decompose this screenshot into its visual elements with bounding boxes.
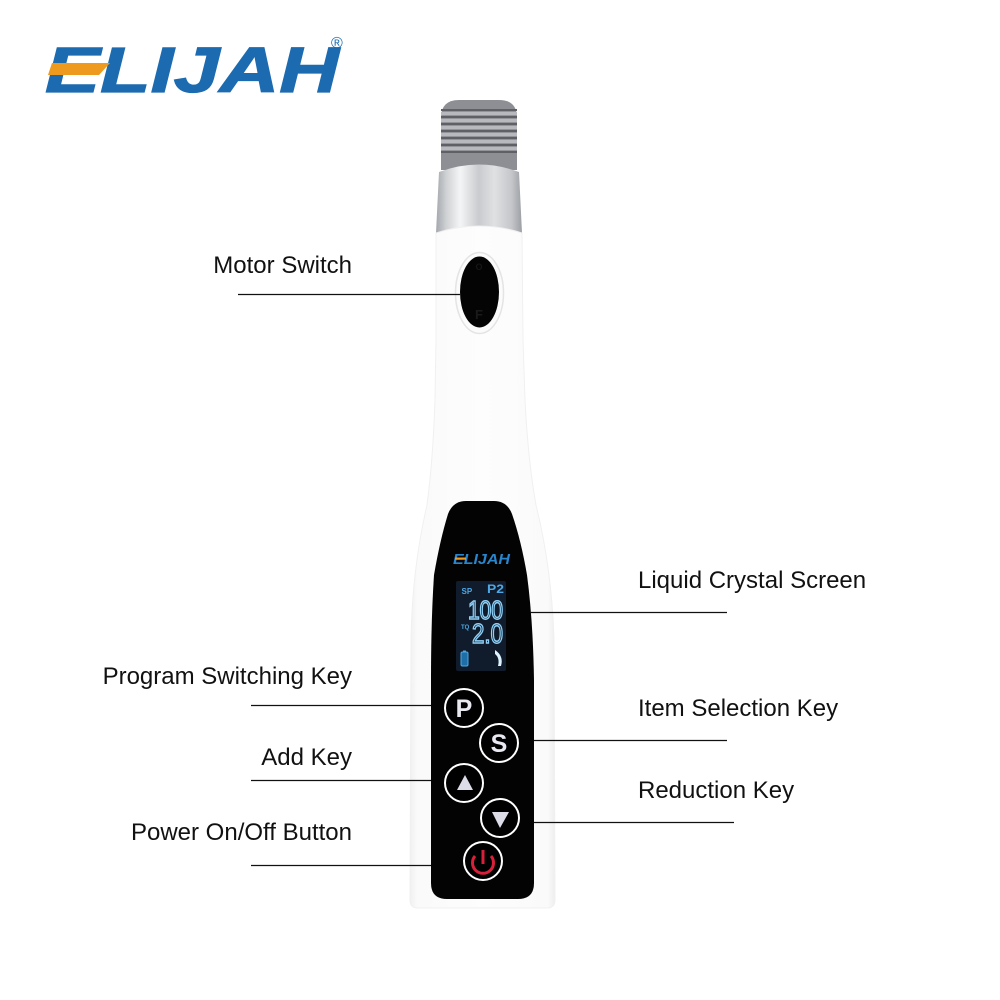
- head: ribbed gray motor head: [441, 100, 517, 170]
- key: select S: [480, 724, 518, 762]
- LCD: torque value: 2.0: [472, 618, 503, 649]
- LCD screen: [456, 581, 506, 671]
- motor switch: oval: F: [475, 307, 483, 322]
- logo: registered mark: ®: [331, 35, 343, 52]
- LCD: TQ label: TQ: [461, 625, 470, 631]
- key: program P: P: [456, 695, 472, 723]
- key: reduce down arrow: [481, 799, 519, 837]
- callout: Program Switching Key: Program Switching Key: [103, 663, 352, 690]
- LCD: program number: P2: [487, 582, 504, 596]
- LCD: SP label: SP: [462, 587, 473, 596]
- motor switch: oval: O: [475, 262, 483, 272]
- logo accent: orange bar: [48, 63, 110, 75]
- device: handpiece: [410, 100, 555, 908]
- callout: Add Key: Add Key: [261, 744, 352, 771]
- control panel: black face: [431, 501, 534, 899]
- key: program P: [445, 689, 483, 727]
- callout: Power On/Off Button: Power On/Off Button: [131, 819, 352, 846]
- LCD: tooth icon: [495, 650, 502, 666]
- body: white handle: [410, 226, 555, 908]
- LCD: speed value: 100: [468, 595, 503, 625]
- panel logo: ELIJAH: [453, 551, 511, 568]
- callout: Reduction Key: Reduction Key: [638, 777, 794, 804]
- LCD: battery icon: [461, 650, 468, 666]
- callout: Liquid Crystal Screen: Liquid Crystal Screen: [638, 567, 866, 594]
- key: add up arrow: [445, 764, 483, 802]
- callout: Motor Switch: Motor Switch: [213, 252, 352, 279]
- motor switch: oval: [456, 252, 504, 334]
- logo: ELIJAH: ELIJAH: [45, 34, 341, 106]
- key: power: [464, 842, 502, 880]
- key: select S: S: [491, 730, 507, 758]
- callout: Item Selection Key: Item Selection Key: [638, 695, 838, 722]
- collar: metal ring: [436, 164, 522, 233]
